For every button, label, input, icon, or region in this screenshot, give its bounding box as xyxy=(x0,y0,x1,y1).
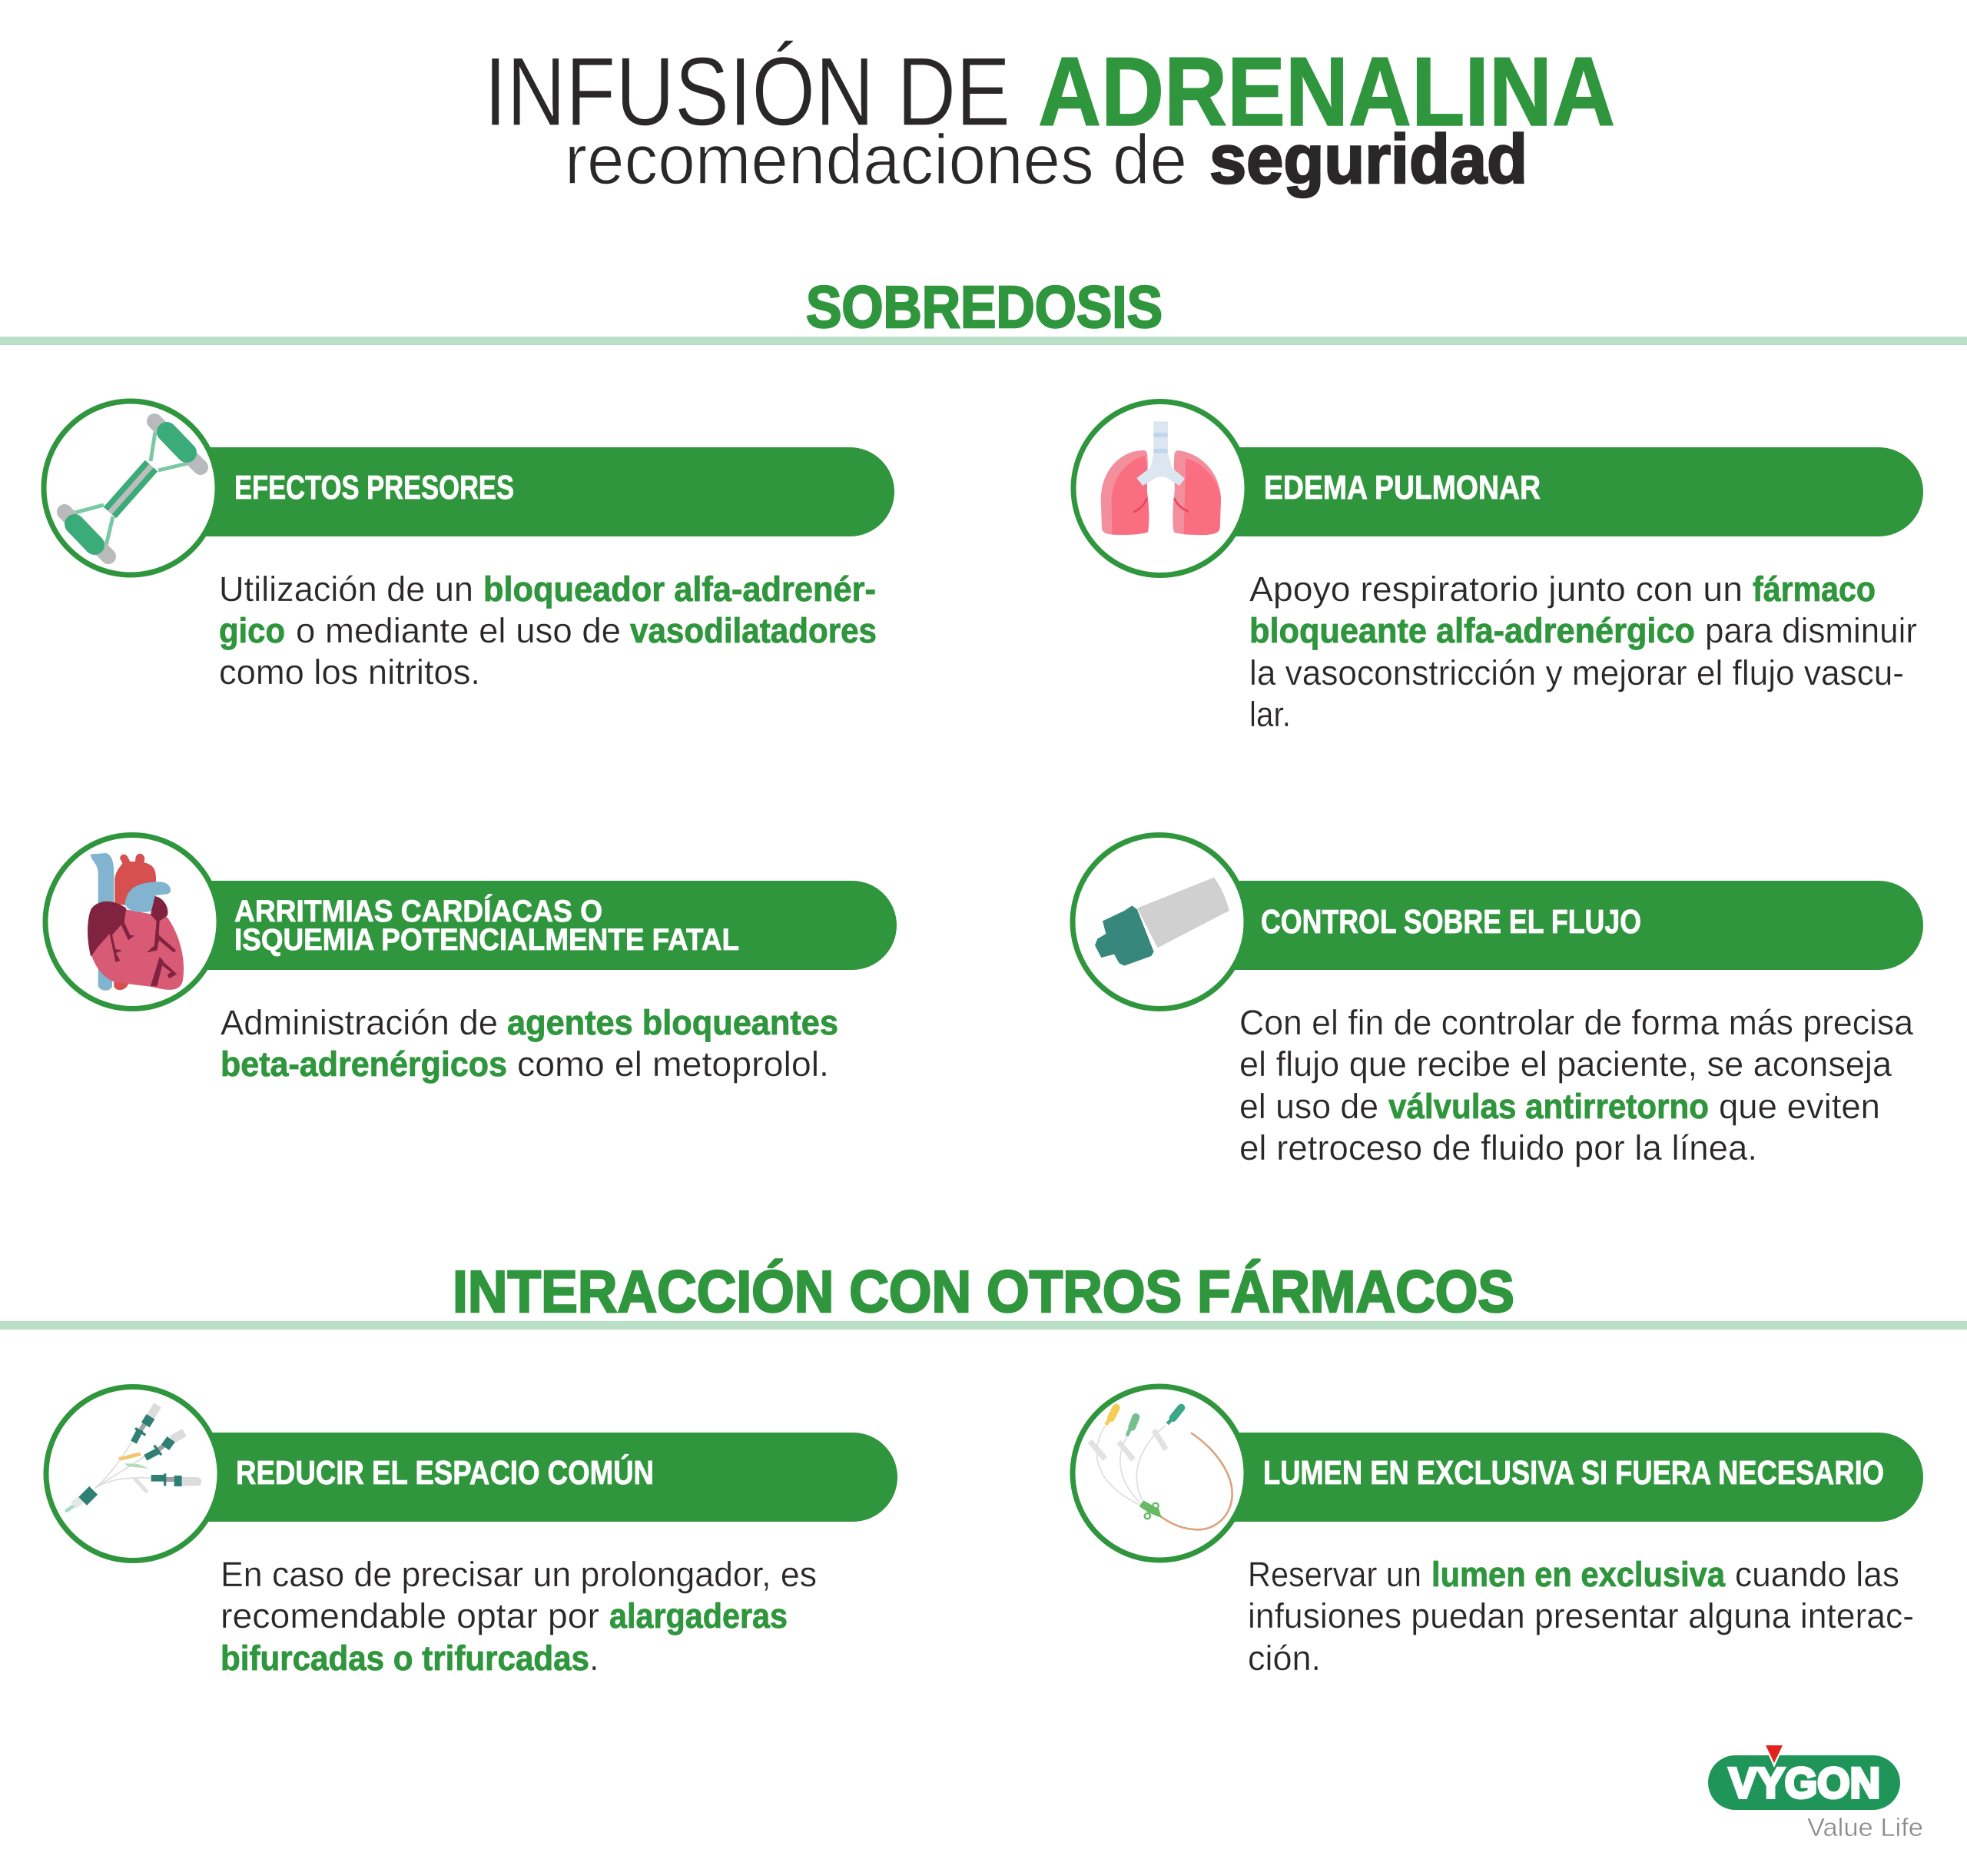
title: ADRENALINA xyxy=(1038,37,1615,146)
panel: reducir el espacio común xyxy=(46,1386,897,1678)
description: válvulas antirretorno xyxy=(1388,1087,1709,1126)
heading: sobredosis: SOBREDOSIS xyxy=(806,274,1163,340)
description: como los nitritos. xyxy=(219,652,480,692)
description xyxy=(221,1003,838,1084)
logo: vygon xyxy=(1708,1745,1923,1841)
heading: interacción con otros fármacos: INTERACCIÓN CON OTROS FÁRMACOS xyxy=(453,1258,1514,1325)
logo: vygon: Value Life xyxy=(1807,1813,1923,1841)
description xyxy=(221,1555,817,1678)
description: el uso de xyxy=(1239,1087,1378,1126)
description: Reservar un xyxy=(1248,1555,1421,1594)
bar title: CONTROL SOBRE EL FLUJO xyxy=(1261,903,1641,941)
icon: heart xyxy=(45,835,219,1008)
description: vasodilatadores xyxy=(630,611,877,650)
description: ción. xyxy=(1248,1639,1321,1678)
description xyxy=(1249,569,1917,734)
description: Apoyo respiratorio junto con un xyxy=(1249,569,1743,609)
header bar xyxy=(1157,1433,1923,1522)
description: o mediante el uso de xyxy=(296,611,621,650)
description xyxy=(1239,1003,1914,1167)
description: lar. xyxy=(1249,695,1291,734)
header bar xyxy=(1157,881,1923,970)
header bar xyxy=(129,447,894,536)
description xyxy=(219,569,877,692)
logo: vygon: VYGON xyxy=(1729,1758,1880,1807)
description: para disminuir xyxy=(1705,611,1917,650)
header bar xyxy=(1159,447,1923,536)
description: Utilización de un xyxy=(219,569,473,609)
description: el retroceso de fluido por la línea. xyxy=(1239,1128,1757,1167)
panel: control sobre el flujo xyxy=(1073,835,1923,1167)
description: cuando las xyxy=(1735,1555,1899,1594)
icon: trifurcated extension xyxy=(46,1386,220,1560)
title: seguridad xyxy=(1209,121,1527,198)
description: fármaco xyxy=(1753,569,1876,609)
panel: edema pulmonar xyxy=(1073,401,1923,734)
description: que eviten xyxy=(1719,1087,1880,1126)
title xyxy=(484,37,1615,199)
description: En caso de precisar un prolongador, es xyxy=(221,1555,817,1594)
icon: valve xyxy=(1073,835,1246,1008)
panel: lumen en exclusiva xyxy=(1073,1386,1923,1678)
bar title: EDEMA PULMONAR xyxy=(1264,469,1541,506)
header bar xyxy=(131,881,897,970)
description: lumen en exclusiva xyxy=(1431,1555,1726,1594)
description: bloqueante alfa-adrenérgico xyxy=(1249,611,1695,650)
description: . xyxy=(589,1639,599,1678)
description: la vasoconstricción y mejorar el flujo vascu- xyxy=(1249,653,1904,692)
description: beta-adrenérgicos xyxy=(221,1044,507,1084)
description: alargaderas xyxy=(609,1596,788,1635)
description: gico xyxy=(219,611,285,650)
description: bloqueador alfa-adrenér- xyxy=(483,569,876,609)
description: Administración de xyxy=(221,1003,498,1042)
description: como el metoprolol. xyxy=(517,1044,829,1084)
icon: catheter xyxy=(1073,1386,1246,1560)
bar title: REDUCIR EL ESPACIO COMÚN xyxy=(236,1453,654,1492)
bar title xyxy=(234,894,739,957)
description: Con el fin de controlar de forma más precisa xyxy=(1239,1003,1914,1042)
title: recomendaciones de xyxy=(565,121,1187,199)
icon: connector xyxy=(44,401,217,575)
header bar xyxy=(131,1433,897,1522)
description: bifurcadas o trifurcadas xyxy=(221,1639,589,1678)
panel: arritmias xyxy=(45,835,897,1084)
description: agentes bloqueantes xyxy=(507,1003,838,1042)
description xyxy=(1248,1555,1914,1678)
description: recomendable optar por xyxy=(221,1596,599,1635)
icon: lungs xyxy=(1073,401,1247,575)
description: el flujo que recibe el paciente, se aconseja xyxy=(1239,1044,1892,1084)
description: infusiones puedan presentar alguna interac- xyxy=(1248,1596,1914,1635)
bar title: EFECTOS PRESORES xyxy=(234,469,514,506)
bar title: ISQUEMIA POTENCIALMENTE FATAL xyxy=(234,923,739,957)
title: INFUSIÓN DE xyxy=(484,37,1010,146)
panel: efectos presores xyxy=(44,401,894,692)
bar title: ARRITMIAS CARDÍACAS O xyxy=(234,894,602,928)
